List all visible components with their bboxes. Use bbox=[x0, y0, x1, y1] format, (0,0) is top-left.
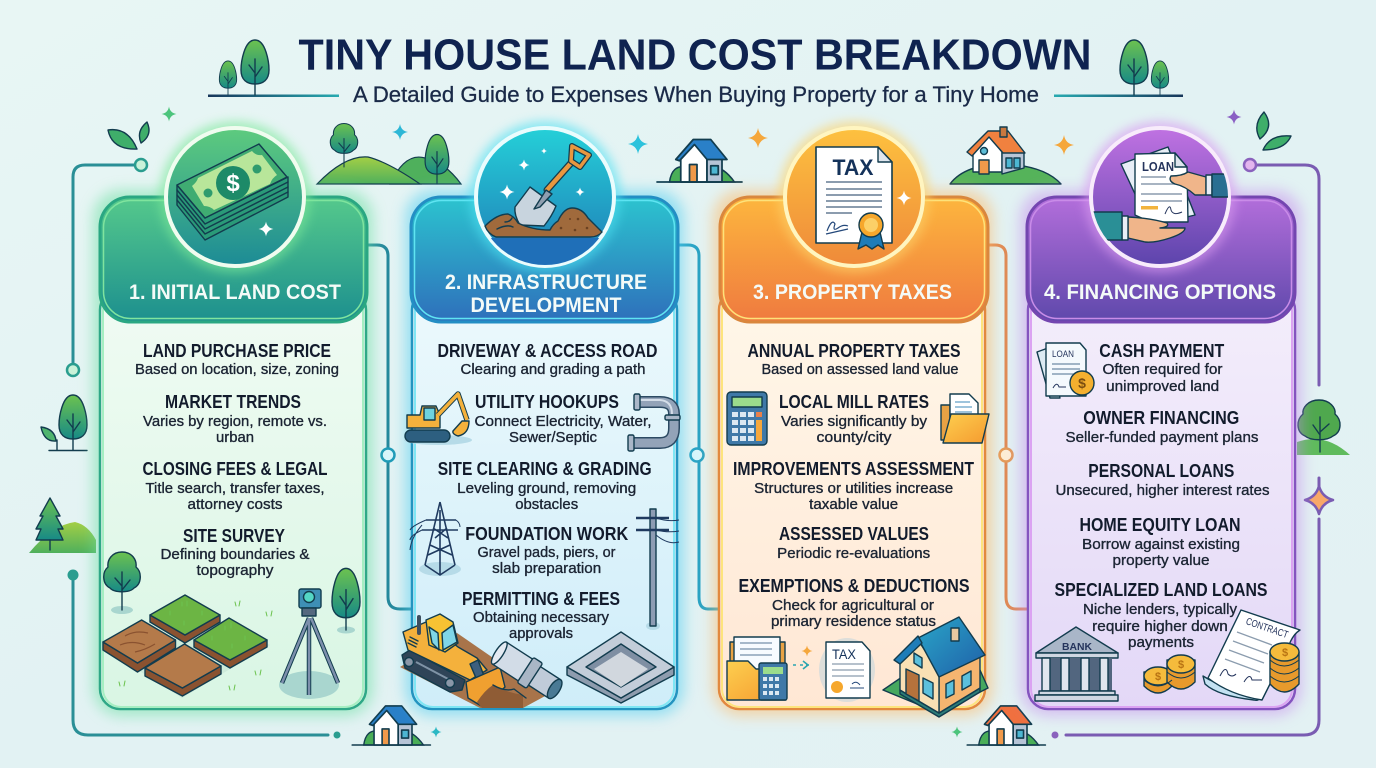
item: personal loans bbox=[1056, 461, 1270, 499]
icon: calculator bbox=[727, 392, 767, 445]
item: improvements assessment bbox=[733, 459, 974, 513]
icon: folder and calculator bbox=[727, 637, 787, 700]
icon: gold coins: $ bbox=[1178, 659, 1184, 671]
decoration: blue house bbox=[628, 128, 768, 182]
icon: utility pole bbox=[636, 509, 679, 630]
item: annual property taxes: ANNUAL PROPERTY TAXES bbox=[748, 341, 960, 361]
connector: panel 2 to 3 bbox=[678, 245, 719, 609]
item: closing fees: CLOSING FEES & LEGAL bbox=[142, 459, 328, 479]
icon: bank bbox=[1035, 627, 1118, 701]
icon: small tax doc: TAX bbox=[832, 646, 857, 662]
item: improvements assessment: Structures or utilities increase bbox=[754, 480, 953, 497]
item: foundation work: Gravel pads, piers, or bbox=[478, 544, 616, 561]
panel: financing options bbox=[1020, 121, 1302, 716]
icon: blue-roof house bbox=[883, 617, 988, 717]
item: permitting: PERMITTING & FEES bbox=[462, 589, 620, 609]
item: driveway: DRIVEWAY & ACCESS ROAD bbox=[438, 341, 658, 361]
item: permitting bbox=[462, 589, 620, 642]
item: utility hookups: Connect Electricity, Water, bbox=[474, 413, 652, 430]
header banner bbox=[100, 197, 367, 322]
decoration: left tree and sprout bbox=[41, 395, 87, 450]
item: personal loans: PERSONAL LOANS bbox=[1088, 461, 1234, 481]
icon: loan document with coin bbox=[1037, 343, 1094, 398]
decoration: leaves top left bbox=[108, 106, 176, 149]
heading: DEVELOPMENT bbox=[470, 294, 622, 317]
icon: loan handshake: LOAN bbox=[1142, 160, 1174, 174]
item: cash payment: Often required for bbox=[1102, 361, 1223, 378]
item: closing fees: attorney costs bbox=[188, 496, 282, 513]
item: cash payment: CASH PAYMENT bbox=[1099, 341, 1224, 361]
icon: pipe bbox=[628, 394, 680, 451]
item: specialized land loans: SPECIALIZED LAND LOANS bbox=[1054, 580, 1268, 600]
icon: folder bbox=[941, 394, 989, 443]
item: permitting: Obtaining necessary bbox=[473, 609, 609, 626]
item: owner financing bbox=[1066, 408, 1258, 446]
panel: initial land cost bbox=[93, 121, 1302, 717]
heading bbox=[445, 271, 647, 317]
item: improvements assessment: taxable value bbox=[809, 496, 898, 513]
item: specialized land loans bbox=[1054, 580, 1268, 651]
item: land purchase price bbox=[135, 341, 339, 378]
decoration: bottom left house bbox=[352, 706, 442, 745]
item: annual property taxes bbox=[748, 341, 960, 378]
icon: cash stack: $ bbox=[226, 170, 240, 197]
item: owner financing: OWNER FINANCING bbox=[1083, 408, 1239, 428]
icon: bulldozer bbox=[400, 614, 547, 708]
decoration: hills and trees bbox=[317, 124, 461, 184]
item: market trends: MARKET TRENDS bbox=[165, 392, 301, 412]
item: site survey: topography bbox=[196, 562, 274, 579]
item: utility hookups: Sewer/Septic bbox=[509, 429, 597, 446]
icon: concrete slab bbox=[567, 632, 674, 703]
icon: small tax doc bbox=[819, 638, 875, 702]
connector: panel 1 to 2 bbox=[368, 245, 411, 609]
item: site clearing: SITE CLEARING & GRADING bbox=[438, 459, 652, 479]
header banner bbox=[1027, 197, 1295, 322]
icon: loan handshake bbox=[1084, 121, 1236, 273]
icon: bank: BANK bbox=[1062, 642, 1093, 653]
connector: left outer bbox=[67, 159, 340, 738]
item: site survey bbox=[160, 526, 310, 579]
panel body bbox=[719, 290, 985, 709]
icon: cash stack bbox=[159, 121, 311, 273]
icon: loan document with coin: LOAN bbox=[1052, 349, 1074, 359]
icon: round tree bbox=[104, 552, 140, 614]
item: exemptions: Check for agricultural or bbox=[772, 597, 934, 614]
item: improvements assessment: IMPROVEMENTS ASSESSMENT bbox=[733, 459, 974, 479]
panel: infrastructure development bbox=[400, 121, 1302, 717]
panel: property taxes bbox=[713, 121, 1302, 717]
title ornament: right trees bbox=[1054, 40, 1183, 97]
item: home equity loan: property value bbox=[1112, 552, 1210, 569]
item: cash payment: unimproved land bbox=[1106, 378, 1219, 395]
item: market trends: urban bbox=[216, 429, 254, 446]
icon: land plots bbox=[103, 595, 272, 698]
connector: panel 3 to 4 bbox=[988, 245, 1028, 609]
item: utility hookups bbox=[474, 392, 652, 446]
icon: tax document: TAX bbox=[832, 155, 874, 180]
item: home equity loan: Borrow against existing bbox=[1082, 536, 1240, 553]
item: foundation work: slab preparation bbox=[492, 560, 601, 577]
icon: gold coins: $ bbox=[1155, 671, 1161, 683]
icon: contract: CONTRACT bbox=[1244, 616, 1289, 641]
item: site survey: Defining boundaries & bbox=[160, 546, 310, 563]
header banner bbox=[720, 197, 988, 322]
icon: coin stack bbox=[1270, 643, 1299, 692]
subtitle: A Detailed Guide to Expenses When Buying Property for a Tiny Home bbox=[353, 82, 1039, 107]
icon: shovel bbox=[469, 121, 621, 278]
item: site survey: SITE SURVEY bbox=[183, 526, 285, 546]
item: closing fees: Title search, transfer taxes, bbox=[146, 480, 324, 497]
panel body bbox=[1028, 290, 1295, 709]
item: assessed values: ASSESSED VALUES bbox=[779, 524, 929, 544]
arrow bbox=[793, 646, 812, 669]
item: assessed values: Periodic re-evaluations bbox=[777, 545, 930, 562]
item: closing fees bbox=[142, 459, 328, 513]
item: local mill rates: Varies significantly by bbox=[781, 413, 928, 430]
item: land purchase price: LAND PURCHASE PRICE bbox=[143, 341, 331, 361]
item: foundation work: FOUNDATION WORK bbox=[465, 524, 628, 544]
icon: power pylon bbox=[410, 502, 461, 576]
icon: excavator bbox=[404, 394, 472, 445]
decoration: right tree and hill bbox=[1297, 400, 1350, 455]
icon: coin stack: $ bbox=[1282, 647, 1288, 659]
icon: tax document bbox=[778, 121, 930, 273]
item: site clearing: obstacles bbox=[515, 496, 578, 513]
icon: gold coins bbox=[1144, 655, 1195, 693]
item: exemptions bbox=[738, 576, 970, 630]
icon: contract bbox=[1203, 610, 1300, 700]
heading: 4. FINANCING OPTIONS bbox=[1044, 281, 1276, 304]
decoration: bottom right house bbox=[952, 706, 1045, 745]
decoration: pine and hill bbox=[29, 498, 96, 553]
item: driveway bbox=[438, 341, 658, 378]
decoration: four point star bbox=[1305, 486, 1333, 514]
item: local mill rates bbox=[779, 392, 929, 446]
heading: 2. INFRASTRUCTURE bbox=[445, 271, 647, 294]
decoration: orange house bbox=[950, 127, 1074, 184]
connector: right outer bbox=[1052, 159, 1319, 738]
icon: tall tree bbox=[332, 568, 360, 634]
item: specialized land loans: payments bbox=[1128, 634, 1194, 651]
heading: 1. INITIAL LAND COST bbox=[129, 281, 341, 304]
item: driveway: Clearing and grading a path bbox=[460, 361, 646, 378]
item: land purchase price: Based on location, size, zoning bbox=[135, 361, 339, 378]
item: personal loans: Unsecured, higher interest rates bbox=[1056, 482, 1270, 499]
item: specialized land loans: require higher down bbox=[1092, 618, 1228, 635]
item: local mill rates: county/city bbox=[816, 429, 892, 446]
title: TINY HOUSE LAND COST BREAKDOWN bbox=[298, 30, 1092, 80]
item: specialized land loans: Niche lenders, typically bbox=[1083, 601, 1237, 618]
item: home equity loan bbox=[1080, 515, 1240, 569]
item: market trends bbox=[143, 392, 327, 446]
item: permitting: approvals bbox=[509, 625, 573, 642]
item: site clearing: Leveling ground, removing bbox=[457, 480, 636, 497]
item: annual property taxes: Based on assessed land value bbox=[762, 361, 958, 378]
title ornament: left trees bbox=[208, 40, 339, 97]
item: utility hookups: UTILITY HOOKUPS bbox=[475, 392, 619, 412]
panel body bbox=[100, 290, 366, 709]
decoration: leaves top right bbox=[1226, 110, 1291, 150]
item: home equity loan: HOME EQUITY LOAN bbox=[1080, 515, 1240, 535]
icon: survey tripod bbox=[279, 589, 339, 699]
panel body bbox=[412, 290, 677, 709]
icon: pipe section bbox=[488, 638, 567, 704]
item: local mill rates: LOCAL MILL RATES bbox=[779, 392, 929, 412]
item: owner financing: Seller-funded payment plans bbox=[1066, 429, 1258, 446]
icon: loan document with coin: $ bbox=[1078, 375, 1086, 391]
item: site clearing bbox=[438, 459, 652, 513]
item: exemptions: primary residence status bbox=[771, 613, 936, 630]
item: foundation work bbox=[465, 524, 628, 577]
item: exemptions: EXEMPTIONS & DEDUCTIONS bbox=[738, 576, 970, 596]
header banner bbox=[411, 197, 678, 322]
item: assessed values bbox=[777, 524, 930, 562]
heading: 3. PROPERTY TAXES bbox=[753, 281, 952, 304]
item: cash payment bbox=[1099, 341, 1224, 395]
item: market trends: Varies by region, remote vs. bbox=[143, 413, 327, 430]
